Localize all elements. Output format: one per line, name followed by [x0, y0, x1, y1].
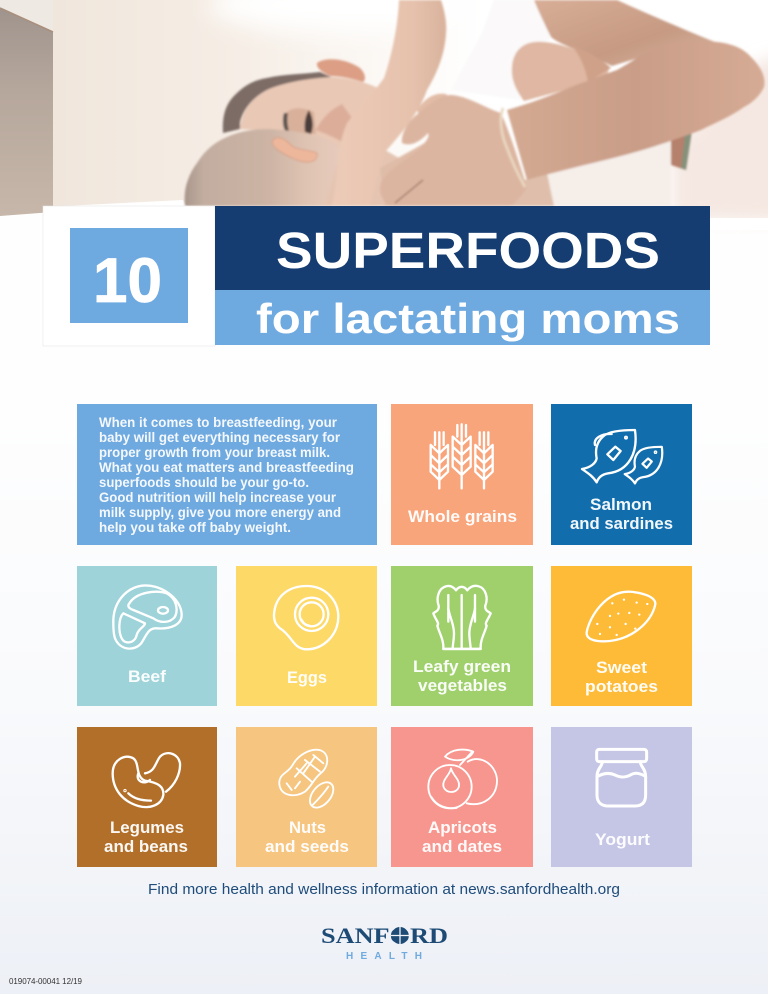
card: apricots and dates: and dates: [422, 838, 502, 856]
icon: jar: [597, 749, 647, 806]
card: legumes and beans: and beans: [104, 838, 188, 856]
number badge: 10: [93, 246, 162, 316]
card: sweet potatoes: Sweet: [596, 659, 648, 677]
card: leafy green vegetables: [391, 566, 533, 706]
card: apricots and dates: Apricots: [428, 819, 497, 837]
panel: introduction: What you eat matters and breastfeeding: [99, 460, 354, 475]
baby raised arm: [332, 0, 446, 206]
panel: introduction: superfoods should be your go-to.: [99, 475, 309, 490]
baby shoulder behind hand: [417, 94, 460, 130]
card: beef: [77, 566, 217, 706]
card: eggs: Eggs: [287, 669, 327, 687]
icon: peanut and seed: [279, 750, 338, 812]
card: leafy green vegetables: Leafy green: [413, 658, 511, 676]
mother forearm: [507, 41, 764, 180]
logo: Sanford Health: SANFORD: [321, 923, 448, 948]
card: legumes and beans: Legumes: [110, 819, 184, 837]
icon: wheat: [431, 424, 493, 488]
number badge: [70, 228, 188, 323]
panel: introduction: milk supply, give you more energy and: [99, 505, 341, 520]
icon: fish: [582, 430, 662, 483]
card: beef: Beef: [128, 668, 167, 686]
baby head: [185, 129, 340, 206]
panel: introduction: baby will get everything necessary for: [99, 430, 341, 445]
card: salmon and sardines: [551, 404, 692, 545]
icon: fried egg: [274, 586, 338, 649]
bed edge right: [710, 218, 768, 230]
card: nuts and seeds: and seeds: [265, 838, 349, 856]
card: apricots and dates: [391, 727, 533, 867]
title: superfoods: [215, 206, 710, 290]
subtitle: for lactating moms: for lactating moms: [256, 295, 680, 342]
card: eggs: [236, 566, 377, 706]
card: salmon and sardines: Salmon: [590, 496, 652, 514]
baby leg: [512, 42, 608, 101]
card: sweet potatoes: potatoes: [585, 678, 658, 696]
mother hand: [380, 95, 527, 206]
title: superfoods: SUPERFOODS: [276, 222, 660, 279]
card: sweet potatoes: [551, 566, 692, 706]
card: yogurt: [551, 727, 692, 867]
icon: sweet potato: [587, 592, 655, 641]
card: whole grains: Whole grains: [408, 508, 517, 526]
card: whole grains: [391, 404, 533, 545]
logo: Sanford Health: HEALTH: [346, 951, 422, 962]
mother upper arm: [534, 0, 715, 66]
shirt: [451, 0, 551, 100]
skin under wrist: [500, 173, 554, 206]
job code: 019074-00041 12/19: [9, 977, 83, 986]
footer link line: Find more health and wellness information at news.sanfordhealth.org: [148, 882, 620, 898]
baby body: [325, 150, 420, 206]
mother face: [240, 77, 378, 150]
panel: introduction: help you take off baby weight.: [99, 520, 291, 535]
white number box: [43, 206, 215, 346]
card: nuts and seeds: Nuts: [289, 819, 326, 837]
icon: beans: [113, 753, 180, 807]
hair: [223, 72, 333, 133]
icon: apricots: [428, 750, 497, 808]
bed edge: [43, 200, 190, 212]
baby ear: [272, 138, 317, 162]
panel: introduction: proper growth from your breast milk.: [99, 445, 330, 460]
card: salmon and sardines: and sardines: [570, 515, 673, 533]
logo: Sanford Health: [321, 923, 448, 962]
photo: mother breastfeeding baby: [0, 0, 768, 230]
icon: leafy greens: [433, 586, 491, 649]
icon: steak: [113, 585, 182, 649]
hair band: [317, 59, 365, 82]
card: leafy green vegetables: vegetables: [418, 677, 507, 695]
garment on right: [672, 50, 768, 222]
stripes: [671, 130, 692, 170]
panel: introduction: Good nutrition will help increase your: [99, 490, 337, 505]
card: legumes and beans: [77, 727, 217, 867]
panel: introduction: When it comes to breastfeeding, your: [99, 415, 338, 430]
card: yogurt: Yogurt: [595, 831, 651, 849]
bracelet: [501, 108, 525, 187]
panel: introduction: [77, 404, 377, 545]
diaper: [547, 140, 671, 206]
card: nuts and seeds: [236, 727, 377, 867]
subtitle: for lactating moms: [215, 290, 710, 345]
title banner: [43, 206, 710, 346]
